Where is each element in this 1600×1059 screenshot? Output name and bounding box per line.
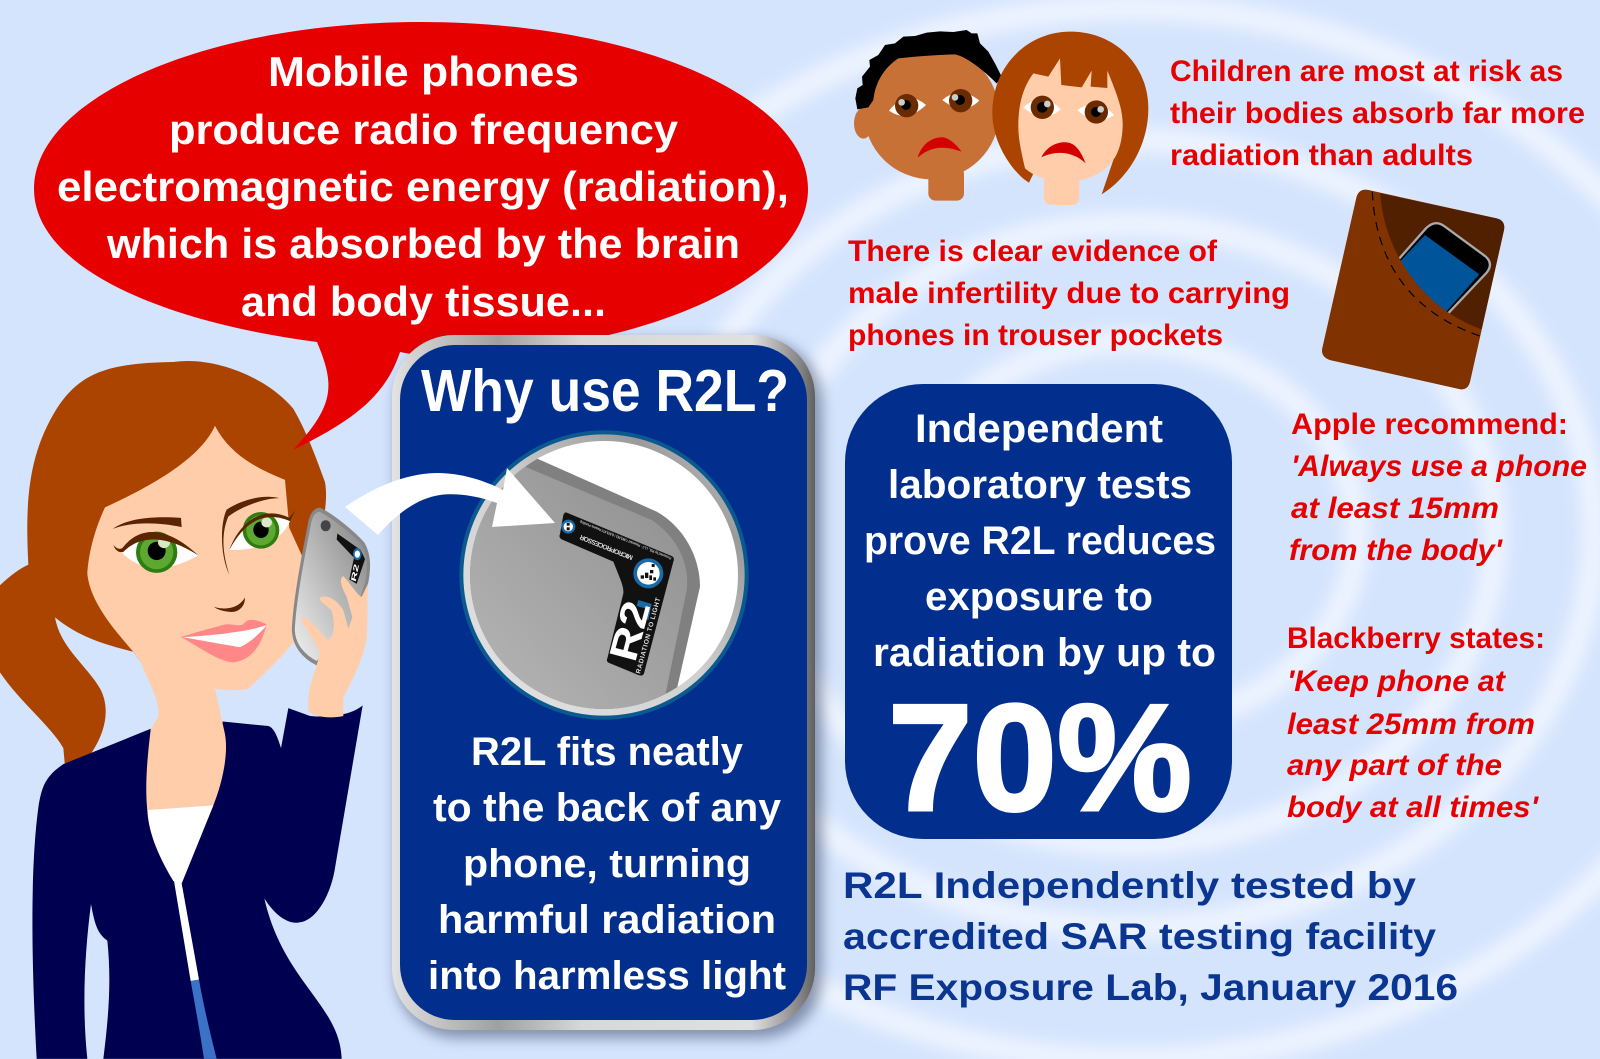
shirt: [147, 805, 213, 883]
face and neck: [87, 426, 304, 810]
speech bubble: [34, 22, 808, 450]
lips: [181, 620, 267, 662]
text: Apple recommendation: Apple recommend:: [1291, 408, 1568, 441]
text: testing facility credit: RF Exposure Lab, January 2016: [843, 967, 1458, 1008]
zip stripe: [174, 881, 199, 981]
test claim text: radiation by up to: [873, 631, 1216, 675]
text: Apple recommendation: 'Always use a phone: [1291, 450, 1587, 483]
hand: [302, 576, 368, 717]
test claim text: prove R2L reduces: [864, 519, 1216, 563]
test claim text: exposure to: [925, 575, 1153, 619]
boy: [854, 30, 1002, 201]
text: testing facility credit: accredited SAR testing facility: [843, 916, 1436, 957]
text: Blackberry statement: least 25mm from: [1287, 708, 1535, 741]
speech bubble text: produce radio frequency: [169, 106, 679, 153]
text: male infertility: phones in trouser pockets: [848, 319, 1223, 352]
panel body text: R2L fits neatly: [471, 730, 744, 774]
text: Blackberry statement: body at all times': [1287, 791, 1539, 824]
sticker: MICROPROCESSOR: [579, 533, 634, 561]
text: testing facility credit: [843, 865, 1458, 1008]
sticker: Protected by R2L, LLC - Patented 7,983,061 / 8,923,972 Patents Pending: [579, 520, 672, 560]
text: children at risk: radiation than adults: [1170, 139, 1473, 172]
panel body text: harmful radiation: [438, 898, 776, 942]
text: Apple recommendation: [1289, 408, 1587, 567]
icon: two worried children: [854, 30, 1148, 205]
text: Blackberry statement: 'Keep phone at: [1287, 665, 1507, 698]
magnified lens showing the R2L sticker on a phone: [457, 430, 749, 720]
70 percent figure: 70%: [888, 673, 1192, 843]
sticker: R2: [601, 596, 659, 666]
sticker: RADIATION TO LIGHT: [635, 597, 662, 675]
right eye: [222, 497, 295, 575]
text: male infertility: There is clear evidence of: [848, 235, 1218, 268]
text: children at risk: [1170, 55, 1585, 172]
text: testing facility credit: R2L Independently tested by: [843, 865, 1416, 906]
text: Blackberry statement: any part of the: [1287, 749, 1502, 782]
panel body text: to the back of any: [433, 786, 782, 830]
icon: phone in trouser pocket: [1322, 190, 1504, 389]
nose: [214, 598, 245, 612]
text: Blackberry statement: Blackberry states:: [1287, 622, 1545, 655]
panel body text: into harmless light: [428, 954, 786, 998]
text: Blackberry statement: [1287, 622, 1545, 824]
text: children at risk: Children are most at risk as: [1170, 55, 1563, 88]
panel heading: Why use R2L?: [421, 358, 789, 424]
woman on the phone: [0, 361, 369, 1059]
text: male infertility: [848, 235, 1290, 352]
speech bubble text: Mobile phones: [268, 48, 579, 95]
girl: [992, 32, 1148, 205]
test claim text: Independent: [915, 407, 1163, 451]
left eye: [113, 517, 198, 573]
text: children at risk: their bodies absorb far more: [1170, 97, 1585, 130]
speech bubble text: and body tissue...: [241, 278, 606, 325]
hair: [0, 361, 326, 766]
text: male infertility: male infertility due to carrying: [848, 277, 1290, 310]
phone at ear: [293, 510, 369, 663]
sticker: [559, 512, 674, 676]
speech bubble text: [57, 48, 789, 325]
speech bubble text: which is absorbed by the brain: [106, 220, 740, 267]
panel body text: phone, turning: [463, 842, 751, 886]
speech bubble text: electromagnetic energy (radiation),: [57, 163, 789, 210]
jacket: [32, 705, 363, 1059]
test claim text: [864, 407, 1216, 675]
text: Apple recommendation: from the body': [1289, 534, 1503, 567]
curved white arrow: [345, 468, 555, 535]
panel: independent tests: [845, 384, 1232, 843]
phone at ear: R2: [350, 563, 361, 583]
panel body text: [428, 730, 786, 998]
test claim text: laboratory tests: [888, 463, 1192, 507]
panel: why use R2L: [392, 335, 822, 1038]
text: Apple recommendation: at least 15mm: [1291, 492, 1499, 525]
